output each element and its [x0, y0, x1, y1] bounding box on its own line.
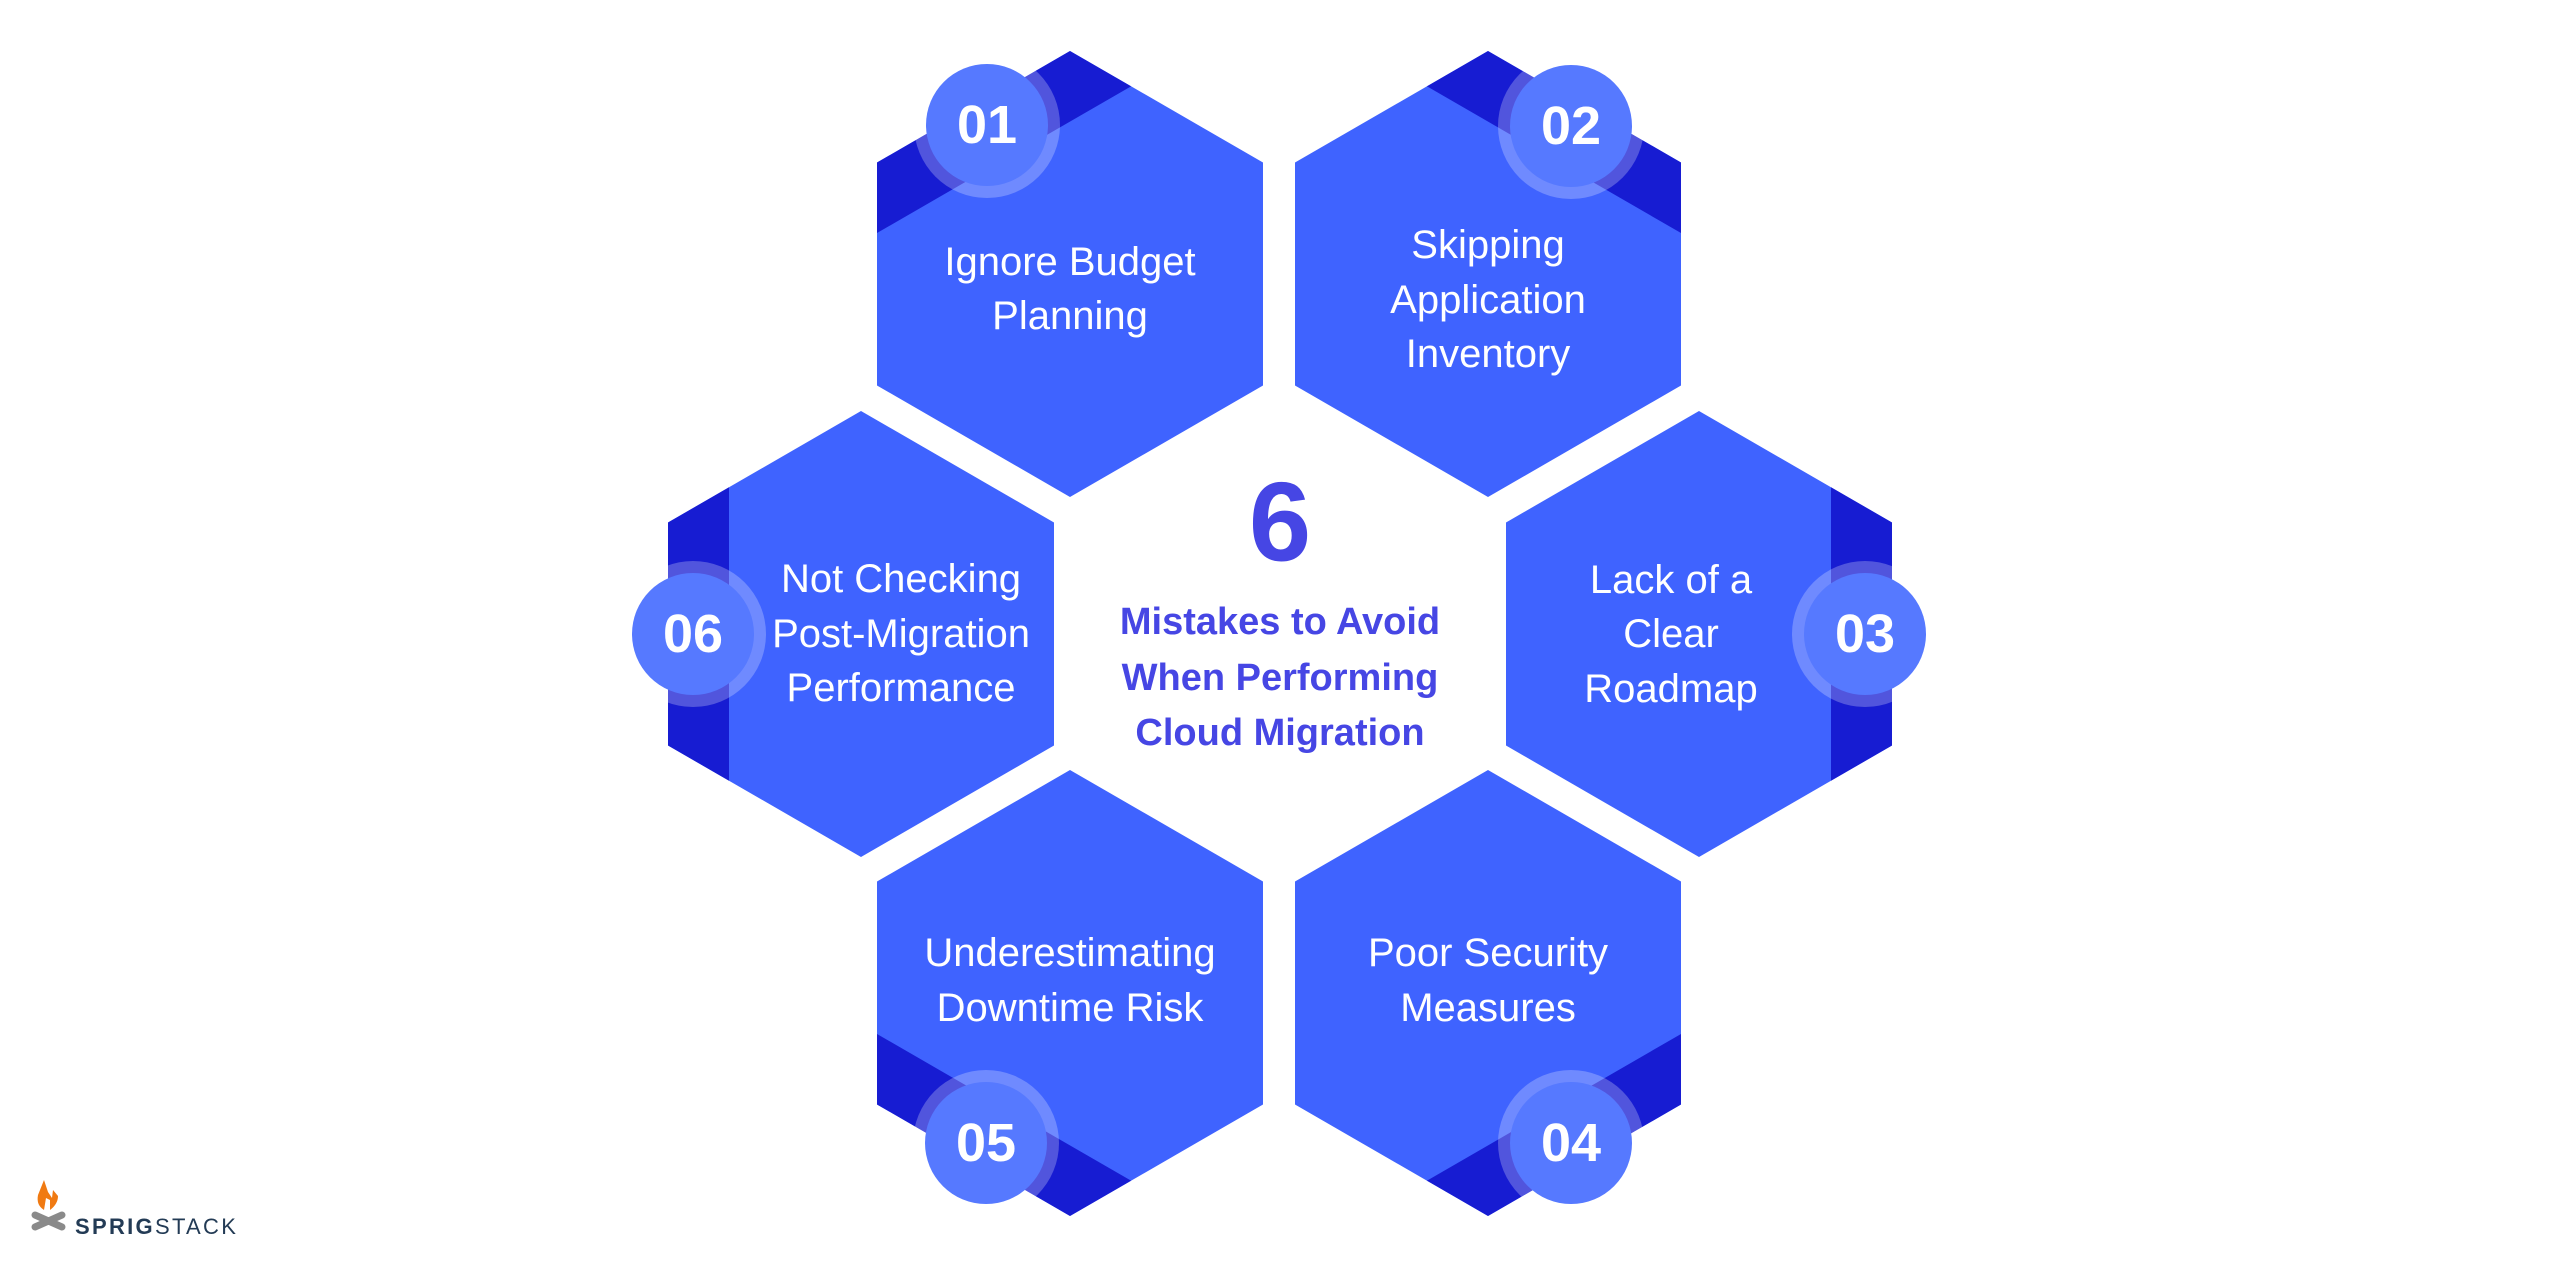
- hexagon 05: Underestimating Downtime Risk: Downtime Risk: [937, 986, 1204, 1030]
- center title: When Performing: [1122, 657, 1438, 699]
- hexagon 06: Not Checking Post-Migration Performance: Not Checking: [781, 557, 1021, 601]
- hexagon 03: Lack of a Clear Roadmap: 03: [1835, 604, 1895, 664]
- hexagon 02: Skipping Application Inventory: Skipping: [1411, 223, 1565, 267]
- center title: Cloud Migration: [1135, 712, 1425, 754]
- hexagon 04: Poor Security Measures: [1295, 770, 1681, 1216]
- center title: 6: [1249, 460, 1311, 584]
- hexagon 05: Underestimating Downtime Risk: Underestimating: [924, 931, 1216, 975]
- logo: Sprigstack: SPRIGSTACK: [75, 1214, 238, 1239]
- hexagon 03: Lack of a Clear Roadmap: Clear: [1623, 612, 1719, 656]
- hexagon 02: Skipping Application Inventory: [1295, 51, 1681, 497]
- hexagon 03: Lack of a Clear Roadmap: Lack of a: [1590, 558, 1753, 602]
- logo: Sprigstack: [35, 1180, 238, 1239]
- hexagon 06: Not Checking Post-Migration Performance: Post-Migration: [772, 612, 1030, 656]
- hexagon 03: Lack of a Clear Roadmap: [1506, 411, 1926, 857]
- hexagon 06: Not Checking Post-Migration Performance: 06: [663, 604, 723, 664]
- hexagon 02: Skipping Application Inventory: 02: [1541, 96, 1601, 156]
- hexagon 01: Ignore Budget Planning: [877, 51, 1263, 497]
- hexagon 01: Ignore Budget Planning: 01: [957, 95, 1017, 155]
- hexagon 06: Not Checking Post-Migration Performance: Performance: [787, 666, 1015, 710]
- center title: [1120, 460, 1440, 754]
- hexagon 04: Poor Security Measures: Poor Security: [1368, 931, 1608, 975]
- hexagon 05: Underestimating Downtime Risk: [877, 770, 1263, 1216]
- hexagon 01: Ignore Budget Planning: Planning: [992, 294, 1148, 338]
- hexagon 05: Underestimating Downtime Risk: 05: [956, 1113, 1016, 1173]
- hexagon 06: Not Checking Post-Migration Performance: [632, 411, 1054, 857]
- center title: Mistakes to Avoid: [1120, 601, 1440, 643]
- hexagon 02: Skipping Application Inventory: Application: [1390, 278, 1586, 322]
- hexagon 04: Poor Security Measures: Measures: [1400, 986, 1576, 1030]
- hexagon 03: Lack of a Clear Roadmap: Roadmap: [1584, 667, 1758, 711]
- hexagon 02: Skipping Application Inventory: Inventory: [1406, 332, 1570, 376]
- hexagon 04: Poor Security Measures: 04: [1541, 1113, 1601, 1173]
- hexagon 01: Ignore Budget Planning: Ignore Budget: [944, 240, 1196, 284]
